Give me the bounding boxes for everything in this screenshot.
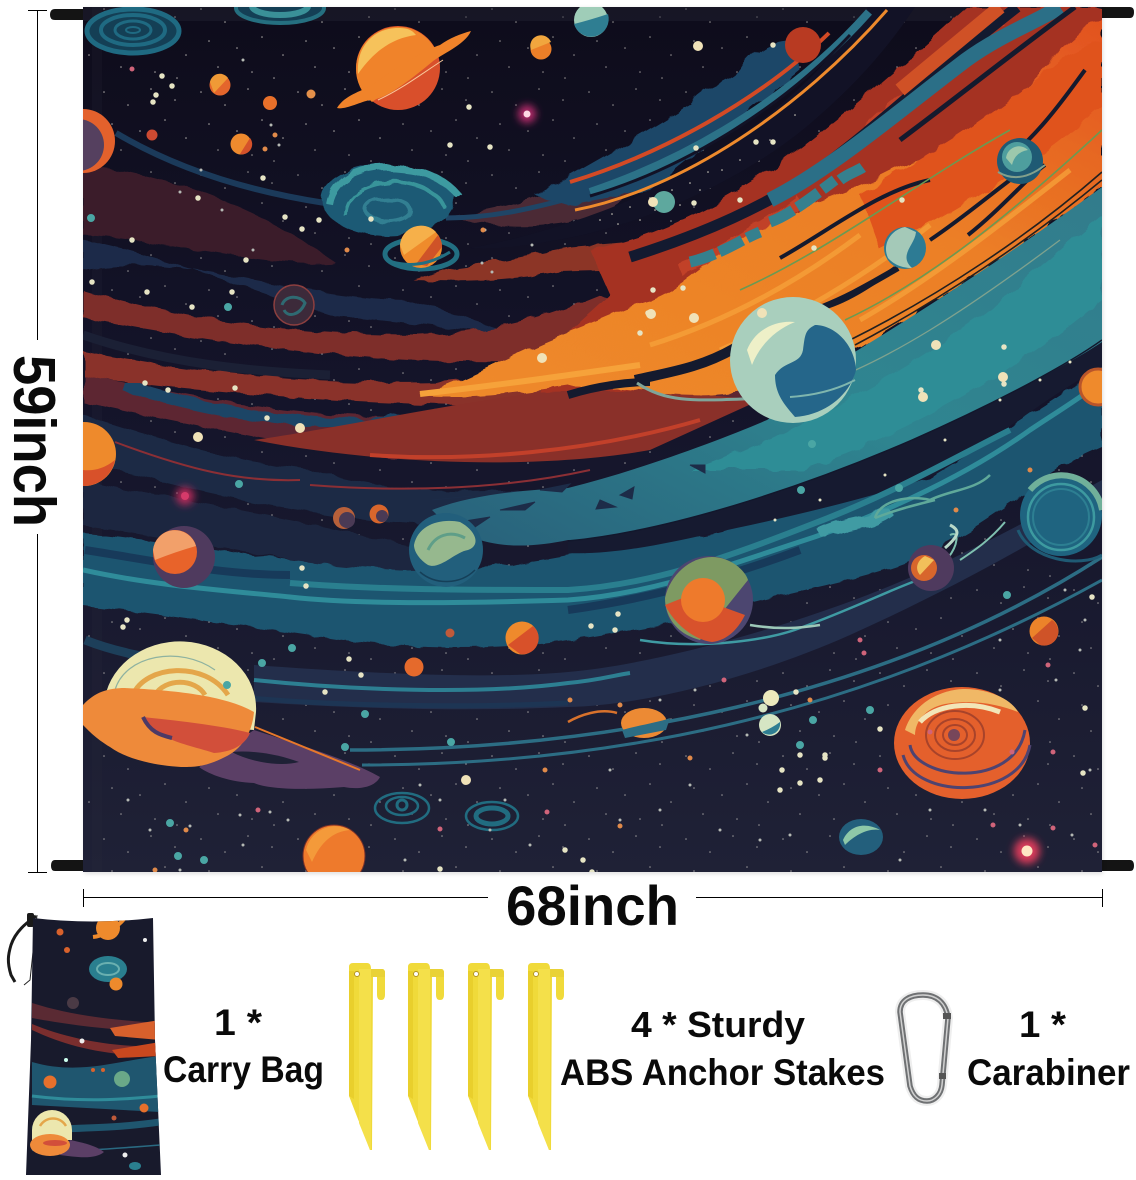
red blob: [785, 27, 821, 63]
dark gashes in orange: [780, 70, 1085, 310]
light teal streaks: [83, 380, 1102, 603]
green streak lines: [740, 130, 1102, 320]
planet: teal rings: [1018, 474, 1102, 561]
deep orange overlays: [860, 40, 1102, 250]
dots: large cream: [198, 46, 1003, 780]
left small star clouds: [83, 7, 383, 147]
planet: right teal: [997, 138, 1045, 184]
dark stripe with stars: [568, 342, 1102, 553]
navy arc upper left: [116, 133, 325, 203]
blue splash around dark sky: [535, 40, 800, 205]
big teal band: [432, 187, 1102, 546]
carabiner label: Carabiner: [967, 1052, 1130, 1093]
dots: pale: [92, 45, 1092, 872]
planet: top left spiral: [87, 9, 179, 53]
planet: big orange striped: [894, 687, 1030, 799]
stakes label: 4 * Sturdy: [631, 1004, 805, 1045]
planet: large pale: [730, 297, 856, 423]
small orange planets: [146, 35, 552, 154]
pale squiggle right: [875, 475, 990, 518]
pale swoosh at big planet: [636, 382, 745, 402]
second teal band: [83, 367, 1102, 648]
red field highlights: [680, 20, 1000, 270]
carry bag label: 1 *: [214, 1002, 263, 1043]
carry bag label: Carry Bag: [163, 1049, 324, 1090]
red bands left: [83, 290, 660, 362]
planet: ringed orange planet: [337, 26, 471, 110]
planet: bottom teal: [839, 819, 883, 855]
height label: 59inch: [1, 355, 67, 527]
planet: orange with ring: [385, 226, 457, 269]
pale cluster planets: [758, 690, 781, 736]
planet: pale teal top: [574, 7, 609, 37]
planet: bottom orange: [303, 825, 365, 887]
planet: multicolour: [665, 556, 753, 644]
navy wide bands lower left: [83, 415, 520, 526]
carabiner label: 1 *: [1019, 1004, 1067, 1045]
teal pattern in orange: [690, 165, 865, 262]
dots: orange accents: [155, 135, 1030, 870]
maroon nebula upper left: [83, 165, 335, 263]
comet strokes: [640, 580, 918, 644]
planets: lower small orange: [404, 616, 1058, 676]
planet: small purple: [908, 525, 957, 591]
hanging bars: [50, 7, 1134, 871]
stakes label: [560, 1004, 885, 1093]
blanket artwork: [51, 0, 1116, 887]
planet: top spiral: [234, 7, 326, 25]
red field: [540, 7, 1102, 392]
lens red band: [254, 385, 760, 462]
black stripe with stars: [542, 8, 905, 239]
planet: left purple: [51, 109, 115, 173]
planet: purple and orange: [153, 526, 215, 588]
planet: left lower orange: [52, 422, 116, 486]
planet: blue and green: [409, 513, 483, 587]
width dimension line: [83, 889, 1102, 907]
glow stars: [176, 105, 1040, 864]
blanket shadow: [84, 8, 1103, 874]
dots: teal: [91, 218, 1007, 860]
planet: small brown swirl: [274, 285, 314, 325]
navy stripe: [630, 7, 1017, 257]
planet: right edge orange: [1080, 369, 1116, 405]
panel: space blanket: [50, 0, 1134, 887]
planet: small striped orange: [568, 708, 670, 738]
orange main sweep: [420, 20, 1102, 397]
planet: cream ringed: [83, 641, 380, 789]
navy wide band left: [83, 240, 520, 335]
upper band group: [456, 192, 632, 228]
width label: 68inch: [506, 874, 679, 937]
dots: small mixed: [128, 60, 1090, 870]
teal orbit lines: [350, 557, 1102, 750]
dots: pink: [132, 69, 1095, 845]
carry bag: [8, 913, 162, 1177]
carabiner: [900, 995, 951, 1101]
thin coloured streaks top: [570, 33, 829, 182]
carabiner label: [967, 1004, 1130, 1093]
lower navy band: [254, 480, 1102, 709]
navy band between red bands: [83, 335, 330, 375]
stakes label: ABS Anchor Stakes: [560, 1052, 885, 1093]
spiral galaxies lower: [375, 793, 518, 830]
blue stripe: [770, 7, 1060, 200]
small planets pair: [333, 504, 388, 529]
planet: teal swirl: [322, 164, 458, 236]
anchor stakes: [349, 963, 564, 1150]
planet: mid teal: [884, 227, 926, 269]
dark blots on teal band: [468, 464, 706, 528]
carry bag label: [163, 1002, 324, 1090]
height dimension line: [28, 10, 47, 872]
planet: small teal: [653, 191, 675, 213]
